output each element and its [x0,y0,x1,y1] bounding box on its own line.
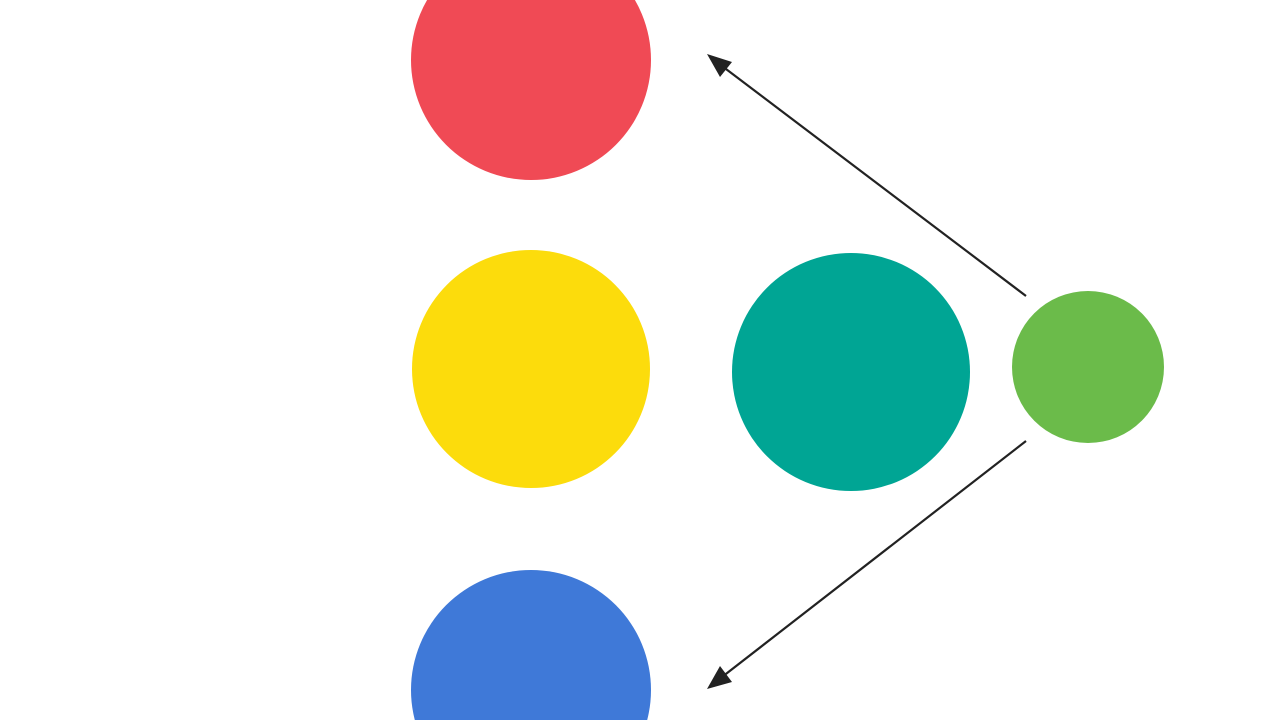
circle: teal [732,253,970,491]
circle: yellow [412,250,650,488]
circle: red [411,0,651,180]
circle: green [1012,291,1164,443]
arrow: up to red [707,54,1026,296]
circle: blue [411,570,651,720]
arrow: down to blue [707,441,1026,689]
